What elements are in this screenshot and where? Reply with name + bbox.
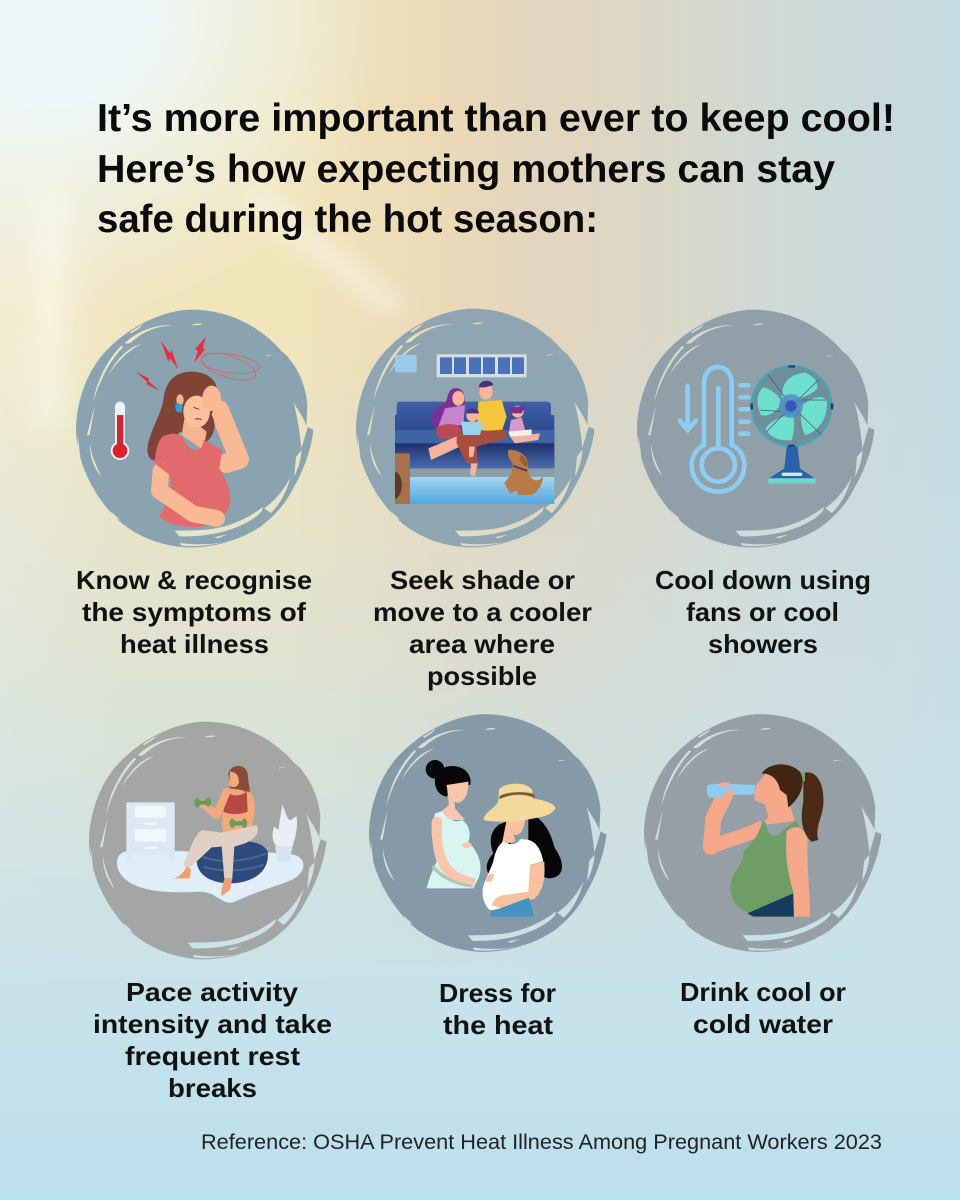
- icon: pain bolts: [136, 337, 206, 391]
- caption 4: intensity and take: [93, 1009, 332, 1039]
- reference footer: Reference: OSHA Prevent Heat Illness Among Pregnant Workers 2023: [201, 1131, 882, 1154]
- caption 5: Dress for: [439, 978, 556, 1008]
- icon: dog: [504, 450, 543, 495]
- caption 3: showers: [708, 629, 818, 659]
- caption 4: frequent rest: [125, 1041, 300, 1071]
- panel: seek shade: [356, 309, 594, 691]
- caption 3: fans or cool: [686, 597, 839, 627]
- caption 6: [680, 977, 846, 1039]
- panel: cool down: [637, 310, 874, 659]
- icon: dizziness orbit: [198, 348, 260, 386]
- caption 4: breaks: [168, 1073, 257, 1103]
- icon: pregnant woman drinking water: [707, 764, 824, 917]
- brush circle 6: [644, 714, 881, 952]
- icon: thermometer: [111, 402, 129, 460]
- caption 2: [373, 565, 592, 691]
- caption 3: Cool down using: [655, 565, 871, 595]
- caption 1: [76, 565, 312, 659]
- brush circle 2: [356, 309, 594, 547]
- caption 5: [439, 978, 556, 1040]
- icon: pregnant woman with headache: [111, 337, 260, 527]
- icon: exercising on a pouf: [117, 766, 303, 903]
- caption 2: Seek shade or: [390, 565, 575, 595]
- panel: pace activity: [89, 722, 332, 1103]
- brush circle 1: [76, 310, 313, 547]
- caption 1: Know & recognise: [76, 565, 312, 595]
- icon: thermometer with down arrow: [680, 367, 748, 492]
- panel: drink water: [644, 714, 881, 1039]
- brush circle 5: [369, 714, 606, 952]
- caption 5: the heat: [443, 1010, 553, 1040]
- caption 1: heat illness: [120, 629, 269, 659]
- title: safe during the hot season:: [97, 198, 598, 241]
- icon: two pregnant women in light clothing: [426, 760, 562, 917]
- title: It’s more important than ever to keep cool!: [97, 97, 895, 140]
- caption 3: [655, 565, 871, 659]
- brush circle 3: [637, 310, 874, 547]
- caption 1: the symptoms of: [82, 597, 306, 627]
- panel: know and recognise symptoms: [76, 310, 313, 659]
- panel: dress for the heat: [369, 714, 606, 1040]
- caption 6: Drink cool or: [680, 977, 846, 1007]
- caption 6: cold water: [693, 1009, 833, 1039]
- brush circle 4: [89, 722, 326, 959]
- icon: electric fan: [750, 365, 833, 484]
- caption 2: move to a cooler: [373, 597, 592, 627]
- caption 4: Pace activity: [126, 977, 299, 1007]
- caption 4: [93, 977, 332, 1103]
- caption 2: possible: [427, 661, 537, 691]
- caption 2: area where: [409, 629, 555, 659]
- title: Here’s how expecting mothers can stay: [97, 148, 835, 191]
- background light rays: [34, 185, 405, 430]
- icon: family on a sofa: [395, 354, 554, 504]
- title: [97, 97, 895, 241]
